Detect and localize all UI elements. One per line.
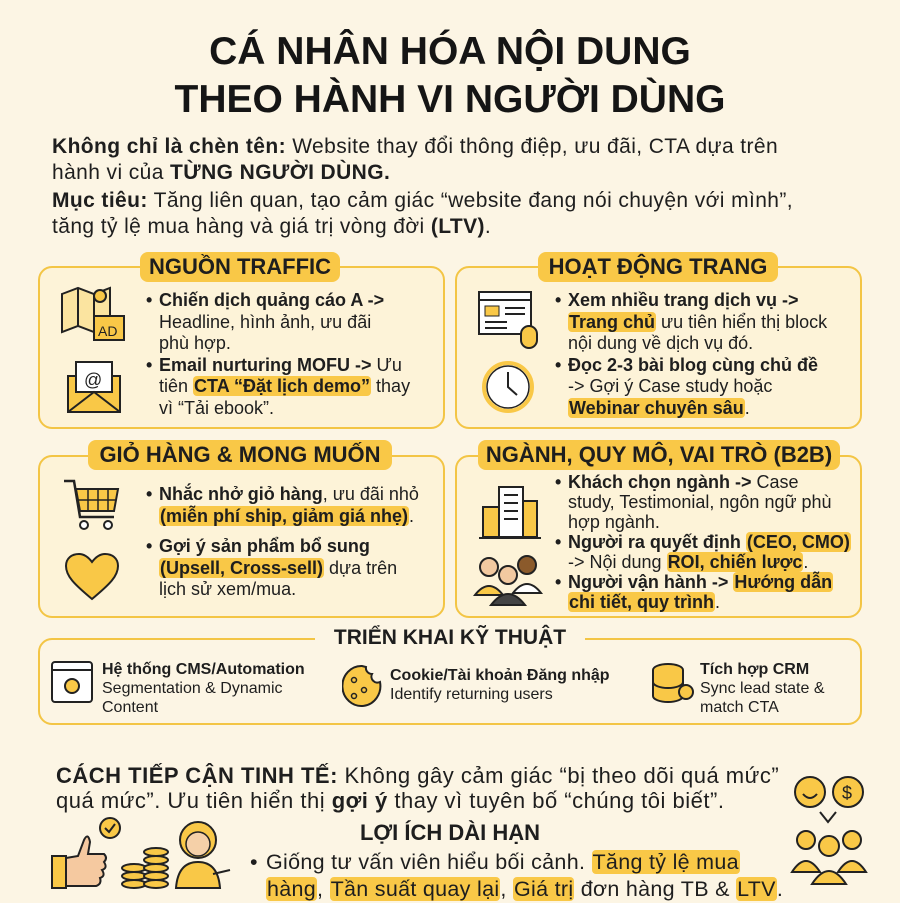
text: nội dung về dịch vụ đó. <box>568 333 753 353</box>
text: hợp ngành. <box>568 512 660 532</box>
panel: nganh b2b <box>455 455 862 618</box>
text: Webinar chuyên sâu. <box>569 398 750 418</box>
icon: crm db <box>652 663 694 703</box>
intro text: Mục tiêu: Tăng liên quan, tạo cảm giác “website đang nói chuyện với mình”, <box>52 189 793 212</box>
panel: hoat dong trang <box>455 266 862 429</box>
text <box>146 483 419 599</box>
icon: browser mouse <box>478 291 538 349</box>
text: Email nurturing MOFU -> Ưu <box>159 354 402 374</box>
icon: people with smiley dollar: $ <box>842 783 852 803</box>
panel: gio hang <box>38 455 445 618</box>
icon: people <box>473 555 543 606</box>
icon: cart <box>64 480 120 530</box>
icon: map ad <box>61 286 125 341</box>
text: cms: Hệ thống CMS/Automation <box>102 661 305 678</box>
intro text: Không chỉ là chèn tên: Website thay đổi thông điệp, ưu đãi, CTA dựa trên <box>52 135 778 158</box>
text: -> Gợi ý Case study hoặc <box>568 376 772 396</box>
text: Gợi ý sản phẩm bổ sung <box>159 536 370 556</box>
intro text: tăng tỷ lệ mua hàng và giá trị vòng đời (LTV). <box>52 215 491 238</box>
title: CÁ NHÂN HÓA NỘI DUNG <box>209 30 691 73</box>
text: cookie: Cookie/Tài khoản Đăng nhập <box>390 667 610 684</box>
text: (miễn phí ship, giảm giá nhẹ). <box>160 506 414 526</box>
pill: gio hang: GIỎ HÀNG & MONG MUỐN <box>99 442 381 467</box>
icon: clock <box>482 361 534 413</box>
title: THEO HÀNH VI NGƯỜI DÙNG <box>174 78 725 121</box>
pill: hoat dong trang: HOẠT ĐỘNG TRANG <box>549 254 767 279</box>
text: Nhắc nhở giỏ hàng, ưu đãi nhỏ <box>159 484 419 504</box>
title <box>174 29 725 121</box>
text <box>556 290 828 418</box>
text <box>146 290 410 418</box>
text: Người ra quyết định (CEO, CMO) <box>568 532 850 552</box>
panel: nguon traffic <box>38 266 445 429</box>
text: Chiến dịch quảng cáo A -> <box>159 290 384 310</box>
text: Khách chọn ngành -> Case <box>568 472 799 492</box>
icon: cms <box>51 661 93 703</box>
icon: email <box>67 361 121 413</box>
text: cookie <box>390 667 610 703</box>
text: cach tiep can: CÁCH TIẾP CẬN TINH TẾ: Không gây cảm giác “bị theo dõi quá mức” <box>56 763 779 788</box>
text: cookie: Identify returning users <box>390 686 553 703</box>
icon: email: @ <box>84 370 102 390</box>
text: -> Nội dung ROI, chiến lược. <box>568 552 808 572</box>
pill: nganh b2b: NGÀNH, QUY MÔ, VAI TRÒ (B2B) <box>486 442 832 467</box>
text: study, Testimonial, ngôn ngữ phù <box>568 492 832 512</box>
text: cms: Segmentation & Dynamic <box>102 680 283 697</box>
text: (Upsell, Cross-sell) dựa trên <box>160 558 397 578</box>
text: cach tiep can <box>56 763 779 813</box>
text: cms: Content <box>102 699 158 716</box>
intro text <box>52 135 793 238</box>
panel: trien khai ky thuat <box>38 638 862 725</box>
text: tiên CTA “Đặt lịch demo” thay <box>159 376 410 396</box>
text: crm: Sync lead state & <box>700 680 825 697</box>
icon: buildings <box>479 486 541 539</box>
text: loi ich: Giống tư vấn viên hiểu bối cảnh. Tăng tỷ lệ mua <box>266 850 739 874</box>
text: crm: Tích hợp CRM <box>700 661 809 678</box>
text: loi ich <box>250 850 783 901</box>
text: crm: match CTA <box>700 699 779 716</box>
icon: cookie <box>342 665 382 707</box>
text: Đọc 2-3 bài blog cùng chủ đề <box>568 354 818 374</box>
intro text: hành vi của TỪNG NGƯỜI DÙNG. <box>52 161 390 184</box>
text: chi tiết, quy trình. <box>569 592 720 612</box>
text: vì “Tải ebook”. <box>159 398 274 418</box>
text: loi ich: • <box>250 850 258 874</box>
heading: loi ich dai han: LỢI ÍCH DÀI HẠN <box>360 820 540 845</box>
icon: heart <box>65 553 119 600</box>
icon: people with smiley dollar <box>790 776 868 885</box>
text: loi ich: hàng, Tần suất quay lại, Giá trị đơn hàng TB & LTV. <box>267 877 783 901</box>
pill: nguon traffic: NGUỒN TRAFFIC <box>149 254 331 279</box>
text: cach tiep can: quá mức”. Ưu tiên hiển thị gợi ý thay vì tuyên bố “chúng tôi biết”. <box>56 788 724 813</box>
text: cms <box>102 661 305 716</box>
text: Xem nhiều trang dịch vụ -> <box>568 290 799 310</box>
text: Headline, hình ảnh, ưu đãi <box>159 312 371 332</box>
heading: trien khai: TRIỂN KHAI KỸ THUẬT <box>334 626 566 649</box>
text <box>556 472 851 612</box>
text: Người vận hành -> Hướng dẫn <box>568 572 832 592</box>
icon: map ad: AD <box>98 323 117 339</box>
text: phù hợp. <box>159 333 231 353</box>
text: crm <box>700 661 825 716</box>
text: lịch sử xem/mua. <box>159 579 296 599</box>
text: Trang chủ ưu tiên hiển thị block <box>569 312 827 332</box>
icons: thumbs coins woman <box>51 817 230 889</box>
